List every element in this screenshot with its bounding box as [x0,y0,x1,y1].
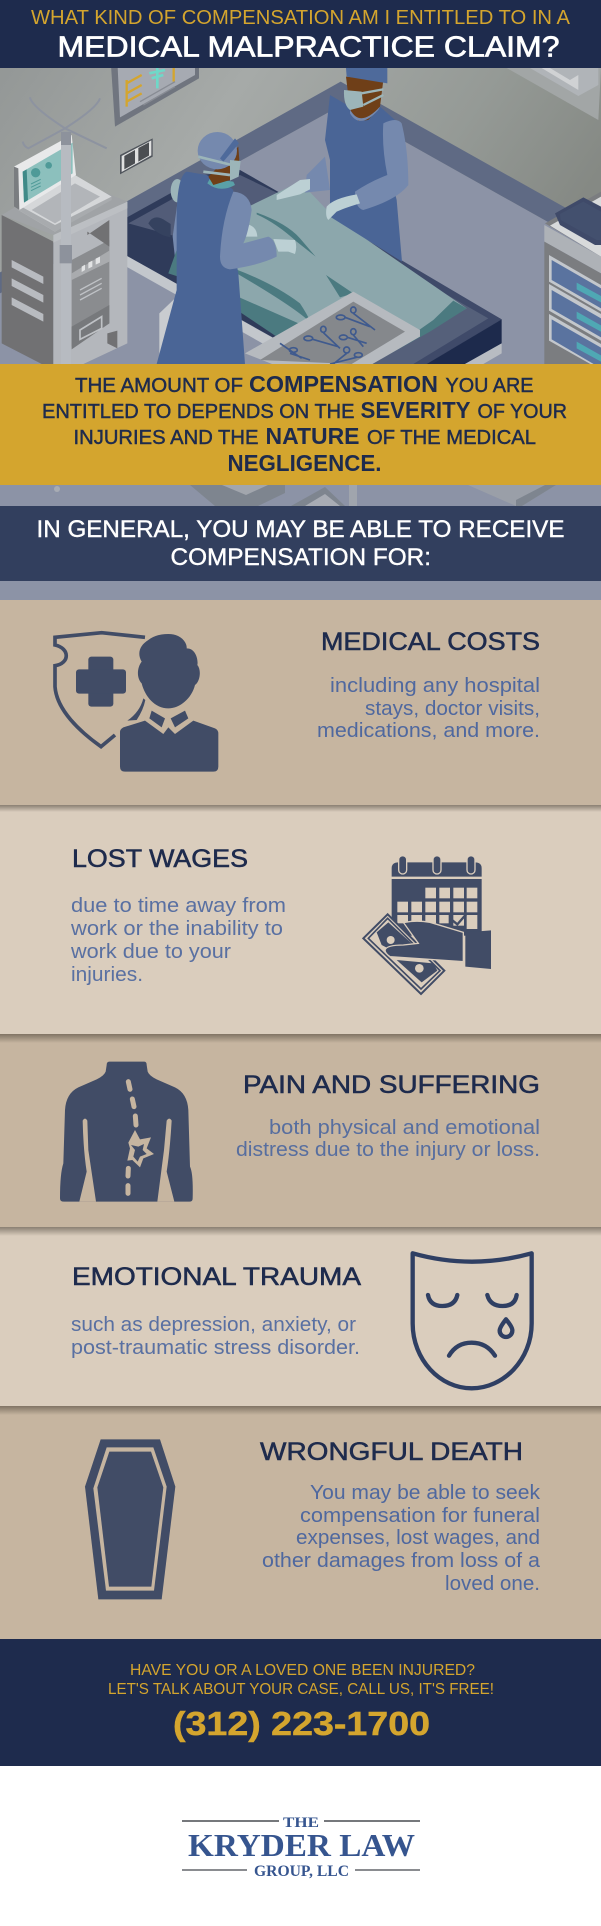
description: stays, doctor visits, [365,698,540,720]
call to action text [108,1662,494,1698]
icon: coffin [85,1439,175,1599]
description: such as depression, anxiety, or [71,1314,356,1336]
laptop [14,135,112,232]
description: including any hospital [330,675,540,697]
side cabinet with drawers [544,192,601,370]
icon: injured back [60,1062,193,1202]
navy band: in general [0,506,601,581]
header question line: WHAT KIND OF COMPENSATION AM I ENTITLED TO IN A [31,6,570,29]
gold statement band: OF YOUR [478,401,567,423]
instrument tray with scissors [245,292,420,364]
illustration: operating room with two surgeons [0,68,601,364]
heading: WRONGFUL DEATH [260,1438,523,1466]
logo: The Kryder Law Group: GROUP, LLC [254,1863,349,1880]
description: due to time away from [71,895,286,917]
description: post-traumatic stress disorder. [71,1337,360,1359]
description: You may be able to seek [310,1482,541,1504]
description: expenses, lost wages, and [296,1527,540,1549]
panel: pain and suffering [0,1034,601,1227]
medical cart [2,97,127,370]
panel: wrongful death [0,1406,601,1639]
description: work due to your [70,941,231,963]
description: compensation for funeral [300,1505,540,1527]
wall outlet [120,138,153,174]
main title: MEDICAL MALPRACTICE CLAIM? [58,32,560,64]
icon: calendar and money in hand [363,856,491,994]
gold statement band: NEGLIGENCE. [228,450,382,476]
operating table [127,170,502,364]
description: both physical and emotional [269,1117,540,1139]
heading: PAIN AND SUFFERING [243,1071,540,1099]
description [71,1314,360,1359]
panel: medical costs [0,600,601,805]
header banner [0,0,601,68]
description: work or the inability to [70,918,283,940]
surgeon: front [157,132,296,364]
call to action footer [0,1639,601,1766]
description [317,675,540,742]
icon: shield and patient [55,633,218,772]
wall monitor [111,68,199,126]
panel: lost wages [0,805,601,1034]
surgeon: back [277,68,408,262]
gold statement band: OF THE MEDICAL [367,427,536,449]
gold statement band: THE AMOUNT OF [75,375,243,397]
surgical sheet [237,188,466,350]
gold statement band: SEVERITY [360,397,470,423]
panel: emotional trauma [0,1227,601,1406]
gold statement band [0,364,601,485]
description: loved one. [445,1573,540,1595]
floor strip behind bands [0,485,601,600]
IV stand [22,98,107,264]
heading: MEDICAL COSTS [321,628,540,656]
call to action text: HAVE YOU OR A LOVED ONE BEEN INJURED? [130,1662,475,1679]
navy band: in general: COMPENSATION FOR: [170,544,431,571]
gold statement band: COMPENSATION [249,371,438,397]
heading: EMOTIONAL TRAUMA [72,1263,361,1291]
gold statement band: INJURIES AND THE [74,427,258,449]
logo: The Kryder Law Group: THE [283,1815,319,1831]
logo: The Kryder Law Group [182,1815,420,1880]
gold statement band: NATURE [266,423,360,449]
description: medications, and more. [317,720,540,742]
description [262,1482,541,1595]
navy band: in general: IN GENERAL, YOU MAY BE ABLE TO RECEIVE [36,516,564,543]
heading: LOST WAGES [72,845,248,873]
logo: The Kryder Law Group: KRYDER LAW [188,1827,415,1863]
description: injuries. [71,964,143,986]
gold statement band: YOU ARE [446,375,534,397]
description: other damages from loss of a [262,1550,541,1572]
description: distress due to the injury or loss. [236,1139,540,1161]
phone number: (312) 223-1700 [173,1705,430,1742]
icon: crying mask [413,1253,532,1388]
gold statement band: ENTITLED TO DEPENDS ON THE [42,401,354,423]
description [70,895,286,986]
call to action text: LET'S TALK ABOUT YOUR CASE, CALL US, IT'S FREE! [108,1681,494,1698]
description [236,1117,540,1161]
